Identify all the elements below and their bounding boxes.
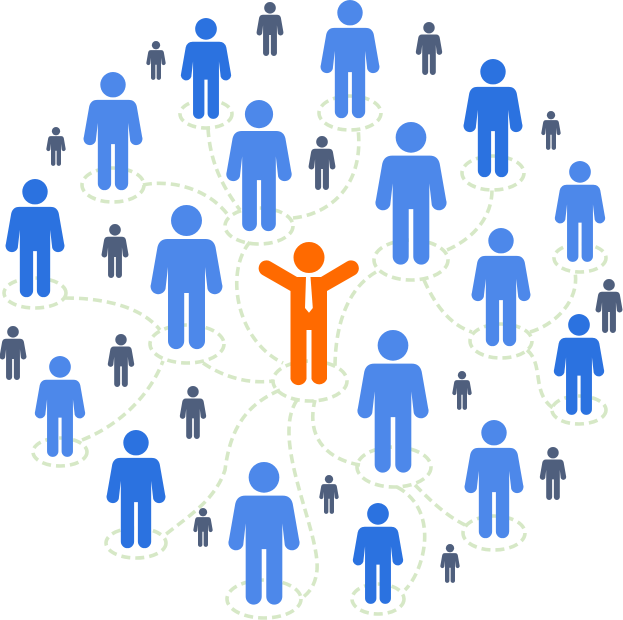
central orange person with raised arms and tie [259,242,359,385]
